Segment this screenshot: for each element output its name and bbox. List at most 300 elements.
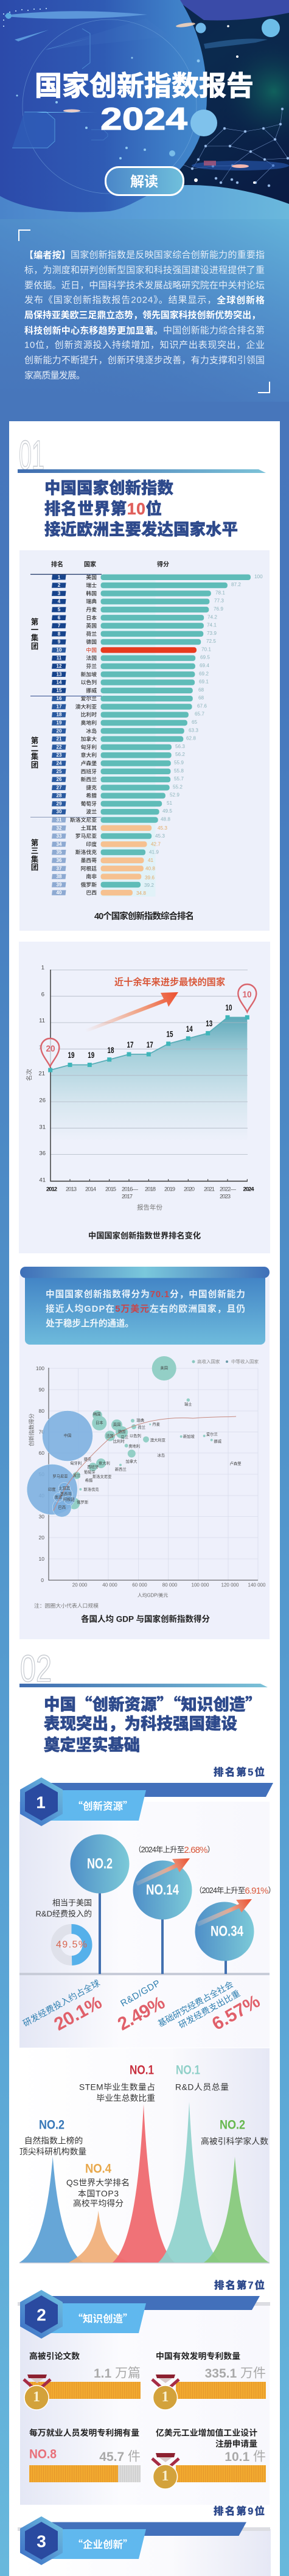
- donut: 49.5%: 49.5%: [56, 1939, 87, 1950]
- x axis labels: [46, 1186, 254, 1200]
- table headers: 国家: [84, 560, 96, 569]
- donut: 49.5%: [56, 1929, 88, 1961]
- row 13 新加坡: 新加坡: [81, 671, 97, 677]
- row 36 墨西哥: 41: [148, 858, 154, 863]
- x axis title: 人均GDP/美元: [138, 1592, 168, 1598]
- row 5 丹麦: 5: [58, 607, 61, 612]
- row 39 俄罗斯: 俄罗斯: [81, 881, 97, 887]
- stat: 每万就业人员: [29, 2427, 141, 2482]
- row 3 韩国: 韩国: [86, 590, 97, 597]
- label: 高被引科学家: 高被引科学家人数: [201, 2137, 268, 2146]
- group label: 第一集团: 第: [31, 617, 39, 626]
- point labels: 10: [225, 1003, 232, 1012]
- point labels: 14: [186, 1024, 193, 1034]
- row 39 俄罗斯: 39.2: [144, 883, 154, 888]
- row 14 以色列: [52, 679, 209, 685]
- row 26 新西兰: [52, 776, 184, 783]
- x axis labels: 2017: [122, 1193, 133, 1200]
- peak: red: [113, 2104, 175, 2263]
- row 39 俄罗斯: 39: [57, 882, 62, 887]
- point labels: 17: [127, 1040, 134, 1049]
- hero banner: [0, 0, 289, 219]
- banner: 知识创造: [20, 2290, 260, 2339]
- row 6 日本: 74.2: [207, 614, 217, 620]
- bubble labels: 印度: [48, 1486, 56, 1492]
- stat: 有效发明专利: 中国有效发明专利数量: [156, 2351, 240, 2361]
- bubble labels: 西班牙: [87, 1464, 99, 1469]
- row 12 芬兰: 12: [57, 663, 62, 669]
- stat: R&D/GDP: R&D/GDP: [119, 1978, 162, 2009]
- editor's note: 发布《国家创新指数报告2024》。结果显示，全球创新格: [24, 295, 265, 306]
- group label: 第二集团: [31, 736, 39, 769]
- y axis labels: 20: [39, 1535, 44, 1541]
- callout: score summary: 处于稳步上升的通道。: [46, 1318, 134, 1329]
- label: 高被引科学家: [201, 2118, 268, 2146]
- row 35 斯洛伐克: 斯洛伐克: [75, 849, 97, 855]
- rank label: 第5位: 排名第5位: [214, 1766, 265, 1778]
- label: STEM: [79, 2063, 155, 2102]
- medal: [152, 2375, 179, 2410]
- bubble labels: 日本: [96, 1419, 103, 1426]
- pin: 10: 10: [242, 990, 252, 999]
- callout: score summary: 中国国家创新指数得分为70.1分，中国创新能力: [46, 1289, 245, 1300]
- stat: 工业设计: 注册申请量: [215, 2438, 257, 2448]
- peak: teal: [158, 2102, 221, 2263]
- bubble labels: 奥地利: [128, 1443, 140, 1449]
- bubble labels: 墨西哥: [60, 1491, 72, 1496]
- bubble labels: 卢森堡: [230, 1461, 242, 1466]
- row 6 日本: [52, 614, 217, 621]
- banner: 创新资源: 1: [36, 1793, 46, 1811]
- row 30 波兰: 49.5: [162, 808, 172, 814]
- row 25 西班牙: 55.8: [174, 768, 184, 774]
- x axis labels: 2018: [145, 1186, 156, 1193]
- row 14 以色列: 14: [57, 680, 62, 685]
- row 7 英国: 74.1: [207, 622, 217, 628]
- editor's note: 【编者按】国家创新指数是反映国家综合创新能力的重要指: [24, 250, 265, 261]
- row 23 意大利: 23: [57, 752, 62, 758]
- row 18 比利时: 65.7: [195, 712, 204, 717]
- row 20 冰岛: 63.3: [189, 727, 198, 733]
- row 24 卢森堡: 55.9: [174, 760, 184, 766]
- rank label: 第9位: 排名第9位: [214, 2505, 265, 2517]
- bubble labels: 俄罗斯: [77, 1499, 89, 1505]
- row 10 中国: 10: [57, 647, 62, 653]
- ranking caption: 40个国家创新指数综合排名: [94, 911, 194, 922]
- row 10 中国: 中国: [86, 646, 97, 653]
- hero year: 2024: [100, 102, 187, 137]
- stat: 基础研究经费占比: 基础研究经费占全社会: [156, 1979, 235, 2029]
- pin: 20: 20: [46, 1043, 55, 1054]
- editor's note: 局保持亚美欧三足鼎立态势，领先国家科技创新优势突出，: [24, 309, 260, 320]
- row 34 印度: 34: [57, 841, 62, 847]
- stat: 高被引论文数: 1.1 万篇: [94, 2367, 141, 2380]
- panel: ranking chart: [19, 550, 270, 931]
- row 17 澳大利亚: [52, 703, 207, 710]
- bubble labels: 瑞典: [136, 1417, 145, 1423]
- x axis labels: 60 000: [132, 1583, 147, 1587]
- x axis labels: 2022—: [220, 1186, 236, 1193]
- editor's note: 创新能力不断提升，创新环境逐步改善，有力支撑和引领国: [24, 354, 265, 365]
- row 38 南非: 南非: [86, 873, 97, 880]
- area under line: [50, 1017, 247, 1141]
- row 11 法国: 法国: [86, 654, 97, 661]
- button: 解读: [106, 167, 184, 195]
- row 1 美国: 1: [58, 575, 61, 580]
- row 13 新加坡: [52, 671, 209, 677]
- text: 相当于美国: 相当于美国: [52, 1898, 92, 1908]
- section 01 headline: 中国国家创新指数: [44, 479, 174, 497]
- row 3 韩国: [52, 590, 225, 597]
- bubble labels: 爱尔兰: [206, 1432, 218, 1437]
- y axis labels: [38, 964, 46, 1183]
- row 34 印度: [52, 841, 161, 847]
- section 01 headline: [44, 479, 238, 539]
- peak: orange: [69, 2211, 129, 2263]
- y axis labels: 40: [39, 1493, 44, 1499]
- row 12 芬兰: 芬兰: [86, 662, 97, 670]
- row 31 斯洛文尼亚: 斯洛文尼亚: [70, 816, 97, 823]
- row 25 西班牙: 25: [57, 769, 62, 774]
- group label: 第一集团: [31, 617, 39, 651]
- x axis labels: 120 000: [221, 1583, 239, 1587]
- bubble labels: 斯洛伐克: [83, 1486, 99, 1492]
- row 12 芬兰: [52, 662, 209, 670]
- bubble labels: 瑞士: [184, 1401, 192, 1407]
- row 31 斯洛文尼亚: 48.8: [161, 817, 170, 822]
- editor's note: 家高质量发展。: [24, 370, 85, 381]
- row 9 德国: 72.5: [206, 639, 216, 644]
- medal: 1: [162, 2389, 169, 2405]
- legend: [192, 1359, 259, 1365]
- x axis labels: 2013: [66, 1186, 77, 1193]
- x axis labels: 100 000: [192, 1583, 209, 1587]
- row 4 瑞典: 瑞典: [86, 598, 97, 604]
- bubble labels: 新西兰: [115, 1466, 127, 1472]
- y axis labels: 36: [39, 1150, 46, 1157]
- row 37 阿根廷: 40.8: [145, 866, 155, 871]
- stat: 每万就业人员: 每万就业人员发明专利拥有量: [29, 2427, 139, 2437]
- group label: 第二集团: 集: [31, 752, 39, 761]
- bubble chart caption: 各国人均 GDP 与国家创新指数得分: [81, 1614, 211, 1624]
- row 40 巴西: 34.8: [136, 891, 146, 896]
- row 29 葡萄牙: 葡萄牙: [81, 800, 97, 807]
- row 10 中国: [52, 646, 211, 653]
- editor's note: 标，为测度和研判创新型国家和科技强国建设进程提供了重: [24, 265, 265, 275]
- row 21 加拿大: [52, 735, 196, 742]
- x axis labels: 2019: [164, 1186, 175, 1193]
- pin: 20: [41, 1038, 59, 1066]
- medal: 1: [33, 2389, 40, 2405]
- panel: 知识创造: [18, 2302, 270, 2505]
- row 22 匈牙利: 22: [57, 744, 62, 750]
- row 24 卢森堡: [52, 760, 184, 766]
- editor's note: [19, 230, 270, 393]
- row 25 西班牙: 西班牙: [81, 768, 97, 774]
- row 28 希腊: [52, 792, 179, 799]
- bubble labels: 德国: [118, 1429, 125, 1434]
- editor's note: 要依据。近日，中国科学技术发展战略研究院在中关村论坛: [24, 280, 265, 291]
- stat: R&D/GDP: 2.49%: [114, 1992, 169, 2035]
- row 31 斯洛文尼亚: [52, 816, 170, 823]
- pin: 10: [238, 984, 256, 1012]
- row 16 爱尔兰: 68: [198, 695, 204, 701]
- bubble labels: 葡萄牙: [84, 1469, 96, 1474]
- label: QS: [66, 2162, 130, 2208]
- row 9 德国: 9: [58, 639, 61, 645]
- rank label: 第7位: 排名第7位: [214, 2279, 265, 2291]
- group label: 第二集团: 二: [31, 744, 38, 753]
- banner: 创新资源: [20, 1777, 273, 1826]
- y axis labels: 0: [41, 1577, 44, 1583]
- note: 6.91%: （2024年上升至6.91%）: [195, 1886, 276, 1895]
- markers: [48, 1015, 249, 1073]
- banner: 知识创造: “知识创造”: [73, 2311, 133, 2325]
- row 8 荷兰: 73.9: [207, 631, 217, 636]
- point labels: [68, 1003, 232, 1060]
- y axis labels: 6: [41, 991, 44, 998]
- row 4 瑞典: 77.3: [214, 598, 224, 604]
- group label: 第一集团: 一: [31, 626, 39, 634]
- lollipop: NO.34: [195, 1899, 254, 1961]
- label: QS: 高校平均得分: [73, 2199, 124, 2208]
- stat: 基础研究经费占比: [156, 1979, 263, 2034]
- bubble labels: 法国: [106, 1433, 114, 1438]
- x axis labels: 140 000: [248, 1583, 266, 1587]
- row 15 挪威: 15: [57, 688, 62, 693]
- row 36 墨西哥: 36: [57, 858, 62, 863]
- row 5 丹麦: 76.9: [214, 606, 223, 612]
- stat: 有效发明专利: 335.1 万件: [205, 2367, 266, 2380]
- x axis labels: 2016—: [122, 1186, 139, 1193]
- row 33 罗马尼亚: [52, 833, 165, 839]
- y axis labels: 80: [39, 1408, 44, 1414]
- section 02 headline: 中国“创新资源”“知识创造”: [44, 1691, 262, 1715]
- row 34 印度: 印度: [86, 841, 97, 847]
- lollipop: NO.14: [133, 1858, 192, 1920]
- bubble labels: 南非: [55, 1494, 63, 1500]
- row 37 阿根廷: 37: [57, 866, 62, 871]
- point labels: 15: [167, 1029, 173, 1039]
- y axis labels: 26: [39, 1097, 46, 1104]
- row 16 爱尔兰: [52, 695, 204, 702]
- row 33 罗马尼亚: 45.3: [155, 833, 165, 839]
- row 15 挪威: [52, 687, 204, 693]
- row 36 墨西哥: [52, 857, 154, 863]
- lollipop sticks: [100, 1893, 226, 1974]
- row 35 斯洛伐克: [52, 849, 159, 855]
- stat: 每万就业人员: 45.7 件: [99, 2449, 141, 2464]
- callout: score summary: [20, 1267, 270, 1345]
- callout: score summary: 接近人均GDP在5万美元左右的欧洲国家，且仍: [46, 1303, 245, 1314]
- row 27 捷克: 55.2: [173, 784, 183, 789]
- bubble labels: 巴西: [58, 1505, 66, 1510]
- row 30 波兰: [52, 808, 172, 815]
- group label: 第三集团: 集: [31, 855, 39, 864]
- section 02 header: 02: [20, 1648, 52, 1690]
- row 32 土耳其: [52, 824, 167, 831]
- y axis labels: 11: [39, 1018, 45, 1024]
- section 02 header: [19, 1648, 268, 1690]
- row 28 希腊: 希腊: [86, 792, 97, 799]
- row 19 奥地利: 奥地利: [81, 719, 97, 726]
- y axis labels: 30: [39, 1513, 44, 1519]
- row 6 日本: 日本: [86, 614, 97, 621]
- row 25 西班牙: [52, 768, 184, 774]
- row 39 俄罗斯: [52, 881, 154, 888]
- row 40 巴西: [52, 890, 146, 896]
- y axis labels: 100: [36, 1365, 44, 1371]
- banner: 企业创新: 3: [37, 2532, 46, 2550]
- y axis labels: 90: [39, 1387, 44, 1393]
- x axis labels: 2024: [243, 1186, 254, 1193]
- bubble labels: 比利时: [113, 1438, 125, 1444]
- lollipop: NO.2: NO.2: [87, 1855, 113, 1872]
- bubble labels: 加拿大: [126, 1458, 138, 1464]
- stat: 高被引论文数: 高被引论文数: [29, 2351, 80, 2361]
- line chart caption: 中国国家创新指数世界排名变化: [88, 1231, 201, 1241]
- baseline: [19, 1973, 270, 1975]
- table headers: 排名: [51, 560, 63, 569]
- row 13 新加坡: 69.2: [199, 671, 209, 676]
- x axis labels: 2015: [105, 1186, 116, 1193]
- pale band behind bars: [101, 574, 156, 897]
- row 27 捷克: 27: [57, 785, 62, 790]
- section 01 header: [18, 432, 266, 478]
- label: 顶尖科研机构: NO.2: [39, 2118, 64, 2132]
- bubble labels: 丹麦: [152, 1421, 161, 1427]
- bubble labels: 以色列: [130, 1433, 141, 1438]
- lollipop: NO.14: NO.14: [146, 1882, 179, 1898]
- point labels: 19: [88, 1050, 94, 1060]
- row 23 意大利: 意大利: [81, 752, 97, 758]
- bubble labels: 波兰: [73, 1472, 80, 1478]
- point labels: 19: [68, 1050, 75, 1060]
- row 13 新加坡: 13: [57, 671, 62, 677]
- lollipop: NO.2: [71, 1835, 129, 1893]
- bubble labels: 澳大利亚: [150, 1437, 166, 1443]
- row 28 希腊: 28: [57, 793, 62, 799]
- bubble labels: 中国: [64, 1433, 71, 1438]
- bubble labels: 意大利: [99, 1460, 110, 1466]
- row 23 意大利: [52, 752, 185, 758]
- bubble labels: 挪威: [214, 1438, 222, 1444]
- callout: fastest progress: 近十余年来进步最快的国家: [114, 976, 225, 987]
- stat: 每万就业人员: NO.8: [29, 2447, 57, 2462]
- row 29 葡萄牙: 29: [57, 801, 62, 807]
- button: 解读: 解读: [130, 173, 158, 189]
- row 27 捷克: [52, 784, 183, 791]
- row 11 法国: [52, 654, 210, 661]
- row 20 冰岛: 冰岛: [86, 727, 97, 734]
- row 1 美国: 100: [254, 574, 263, 579]
- row 8 荷兰: 荷兰: [86, 630, 97, 637]
- y axis labels: 41: [39, 1177, 46, 1183]
- point labels: 17: [147, 1040, 153, 1049]
- group label: 第一集团: 集: [31, 633, 39, 642]
- row 1 美国: 美国: [86, 573, 97, 580]
- row 17 澳大利亚: 67.6: [197, 704, 207, 709]
- row 21 加拿大: 21: [57, 737, 62, 742]
- row 31 斯洛文尼亚: 31: [57, 817, 62, 823]
- label: QS: NO.4: [85, 2162, 111, 2175]
- bubble labels: 芬兰: [120, 1434, 128, 1440]
- bubble labels: 土耳其: [58, 1485, 70, 1491]
- row 15 挪威: 68: [198, 687, 204, 693]
- bubble labels: 斯洛文尼亚: [92, 1474, 112, 1479]
- label: R&D人员总量: [175, 2063, 229, 2091]
- row 30 波兰: 波兰: [86, 808, 97, 815]
- row 21 加拿大: 62.8: [186, 736, 196, 741]
- bubble labels: 罗马尼亚: [52, 1474, 68, 1479]
- legend: 中等收入国家: [231, 1359, 259, 1365]
- row 22 匈牙利: [52, 743, 185, 750]
- section 02 headline: [44, 1691, 262, 1754]
- row 18 比利时: 比利时: [81, 711, 97, 718]
- label: 顶尖科研机构: 顶尖科研机构数量: [19, 2147, 86, 2156]
- x axis labels: 2023: [220, 1193, 231, 1200]
- bubble labels: 匈牙利: [70, 1460, 82, 1466]
- row 11 法国: 11: [57, 656, 62, 661]
- white content panel: [9, 421, 280, 2576]
- row 17 澳大利亚: 17: [57, 704, 62, 710]
- bubble labels: 英国: [113, 1422, 120, 1427]
- label: 顶尖科研机构: 自然指数上榜的: [24, 2135, 83, 2145]
- bubble labels: 韩国: [93, 1411, 101, 1417]
- y axis labels: 1: [41, 964, 44, 971]
- label: R&D人员总量: R&D人员总量: [175, 2083, 229, 2091]
- row 26 新西兰: 新西兰: [81, 776, 97, 783]
- point labels: 18: [107, 1045, 114, 1055]
- row 2 瑞士: 2: [58, 583, 61, 588]
- peak: blue: [19, 2157, 83, 2263]
- banner: 企业创新: [20, 2516, 246, 2565]
- row 18 比利时: [52, 711, 204, 718]
- banner: 创新资源: “创新资源”: [73, 1798, 133, 1813]
- row 38 南非: [52, 873, 155, 881]
- row 15 挪威: 挪威: [86, 687, 97, 693]
- label: STEM: 毕业生总数比重: [96, 2094, 155, 2102]
- trend curve: [54, 1416, 236, 1511]
- group label: 第三集团: 第: [31, 838, 39, 847]
- row 38 南非: 39.6: [145, 875, 155, 881]
- row 19 奥地利: [52, 719, 198, 726]
- row 21 加拿大: 加拿大: [81, 735, 97, 742]
- y axis labels: 70: [39, 1429, 44, 1435]
- row 36 墨西哥: 墨西哥: [81, 857, 97, 863]
- row 28 希腊: 52.9: [170, 793, 179, 798]
- table headers: [51, 560, 169, 569]
- stat: 研发经费投入约占全球: 20.1%: [51, 1992, 105, 2035]
- text: 相当于美国: [36, 1898, 92, 1919]
- row 30 波兰: 30: [57, 809, 62, 814]
- panel: GDP bubble chart: [19, 1275, 270, 1639]
- row 3 韩国: 78.1: [215, 590, 225, 595]
- bubbles: [68, 1356, 213, 1510]
- row 18 比利时: 18: [57, 712, 62, 718]
- row 2 瑞士: 瑞士: [86, 582, 97, 589]
- row 19 奥地利: 19: [57, 720, 62, 726]
- group label: 第三集团: 团: [31, 863, 38, 872]
- row 4 瑞典: [52, 598, 224, 604]
- label: QS: 本国TOP3: [78, 2189, 119, 2199]
- bubble labels: 冰岛: [157, 1452, 165, 1458]
- grid: [49, 1368, 258, 1580]
- y axis labels: 16: [38, 1045, 45, 1051]
- row 8 荷兰: 8: [58, 631, 61, 637]
- medal: [152, 2453, 179, 2489]
- row 37 阿根廷: [52, 865, 155, 872]
